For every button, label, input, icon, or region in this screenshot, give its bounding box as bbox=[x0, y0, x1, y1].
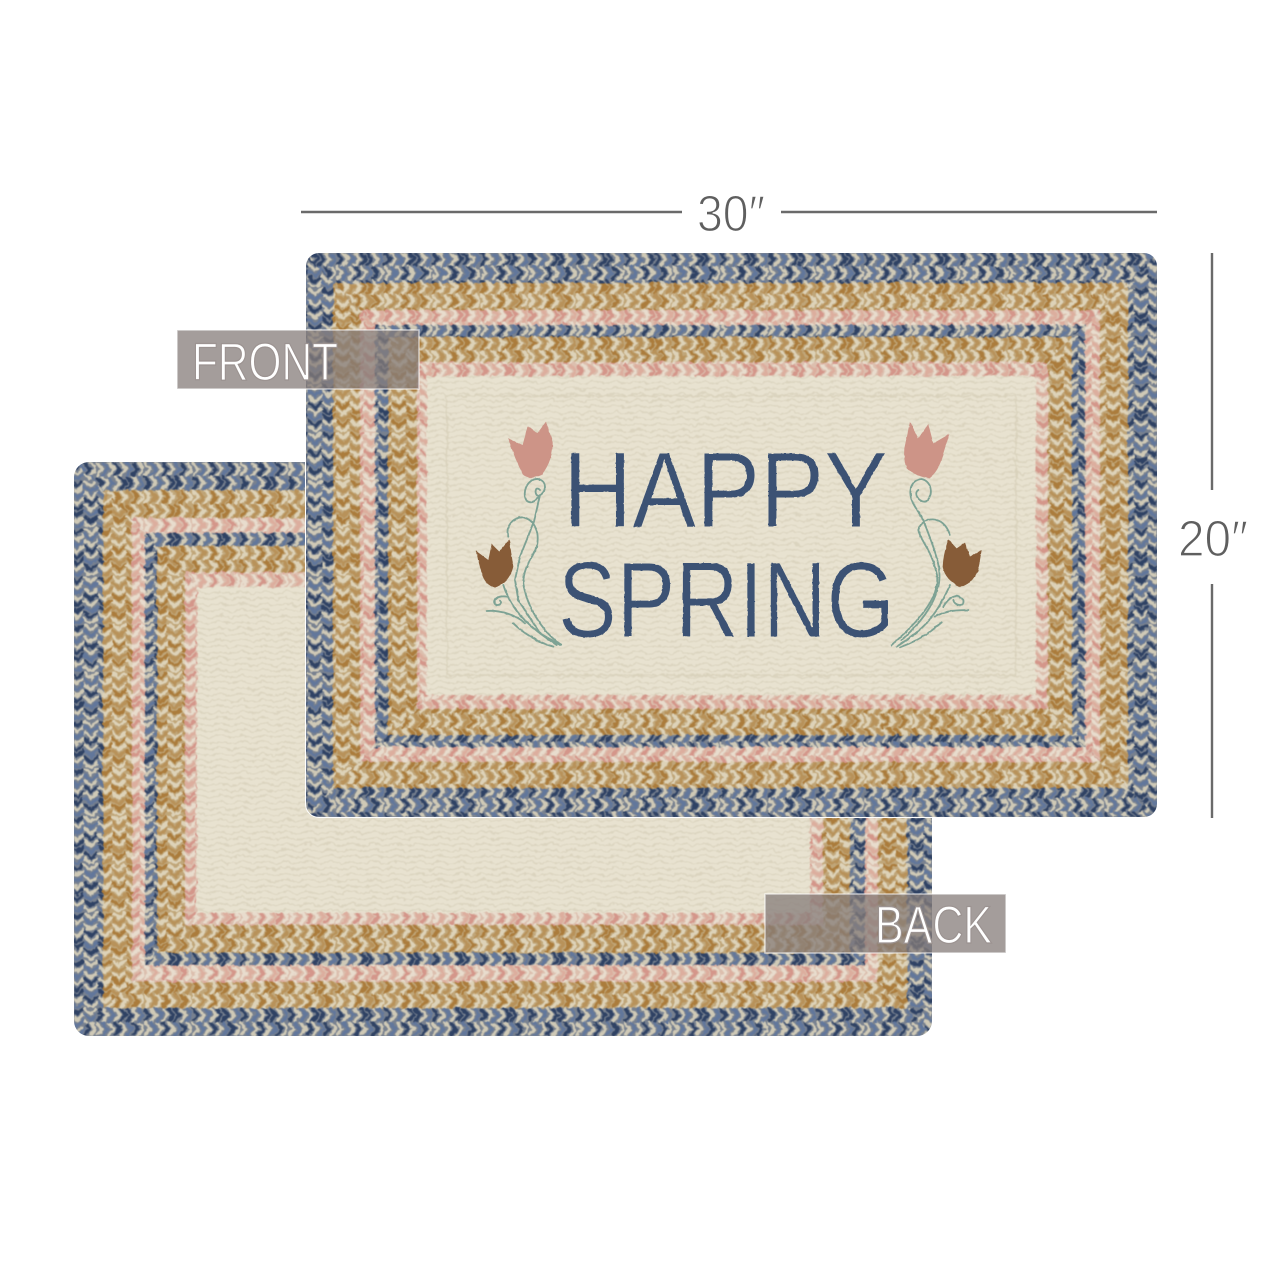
front rug halo bbox=[305, 252, 1158, 818]
back rug bbox=[70, 458, 936, 1040]
rug artwork: greeting and tulips bbox=[476, 422, 982, 660]
back rug: centre field bbox=[193, 583, 814, 917]
rug text: HAPPY: HAPPY bbox=[563, 429, 888, 550]
left tulips bbox=[476, 422, 562, 647]
rug text: SPRING: SPRING bbox=[558, 539, 895, 660]
width dimension: 30 inches: 30″ bbox=[697, 185, 765, 242]
label: BACK: BACK bbox=[875, 896, 992, 955]
label: BACK bbox=[765, 894, 1006, 955]
front rug bbox=[302, 249, 1161, 821]
front rug: centre field bbox=[423, 372, 1040, 699]
label: FRONT: FRONT bbox=[192, 333, 338, 392]
height dimension: 20 inches: 20″ bbox=[1178, 510, 1248, 567]
right tulips bbox=[892, 422, 982, 647]
